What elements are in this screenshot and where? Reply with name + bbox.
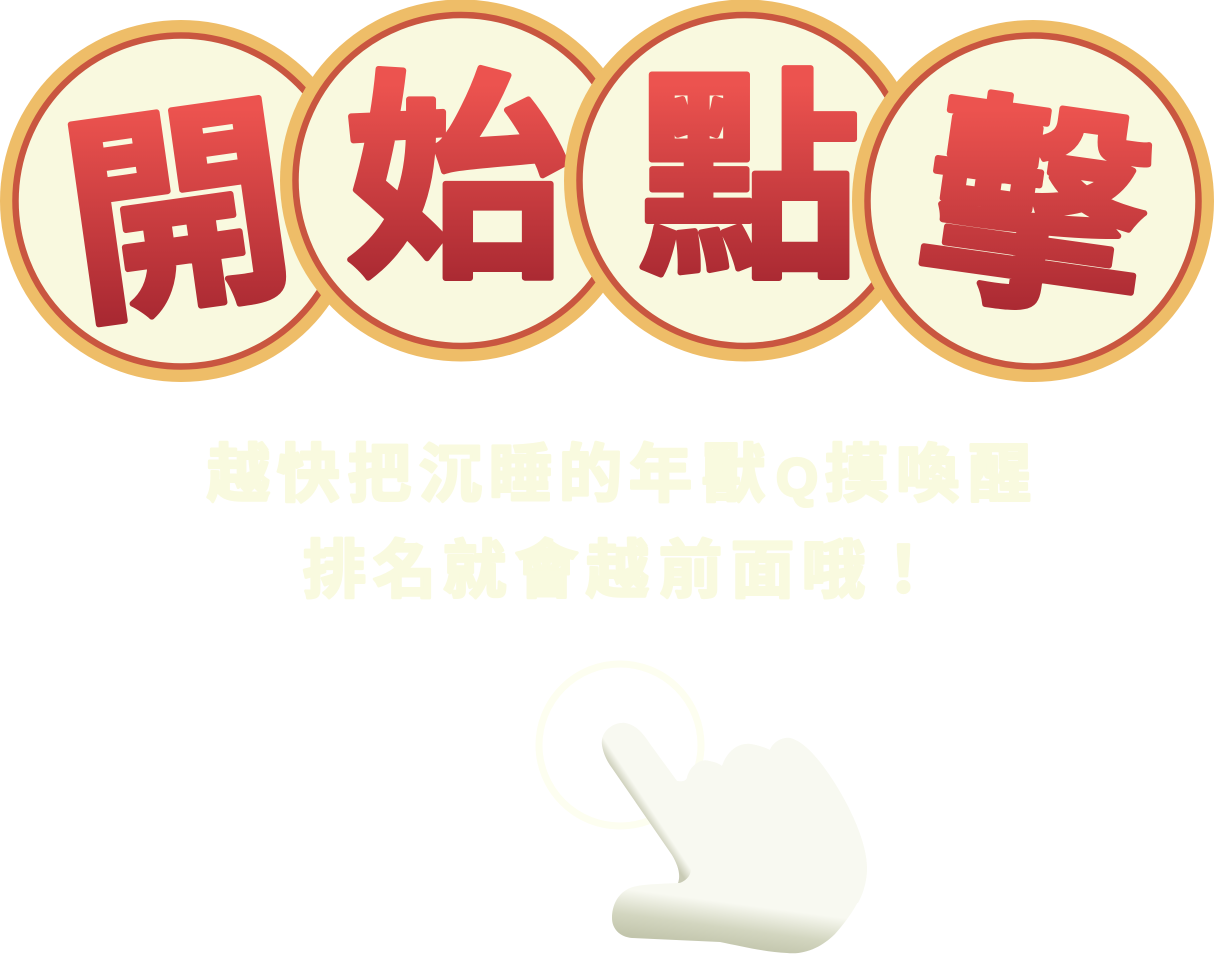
icon: tap ring [539, 664, 701, 826]
badge: 始: 始 [345, 56, 569, 306]
subtitle line 2: 排名就會越前面哦！ [303, 536, 935, 606]
badge: 開 [0, 20, 362, 382]
badge: 擊: 擊 [907, 74, 1164, 352]
badge: 點 [564, 0, 926, 362]
hand shadow base [602, 723, 867, 953]
badge: 開: 開 [50, 76, 307, 354]
hand light face [604, 723, 867, 906]
badge: 始 [280, 0, 642, 362]
subtitle line 1: 越快把沉睡的年獸 [207, 440, 765, 510]
subtitle line 1: 摸喚醒 [825, 440, 1031, 510]
badge: 擊 [852, 20, 1214, 382]
subtitle line 1: Q [776, 448, 818, 508]
icon: pointing hand [602, 723, 867, 953]
finger side shading [602, 728, 720, 883]
badge: 點: 點 [637, 56, 861, 306]
